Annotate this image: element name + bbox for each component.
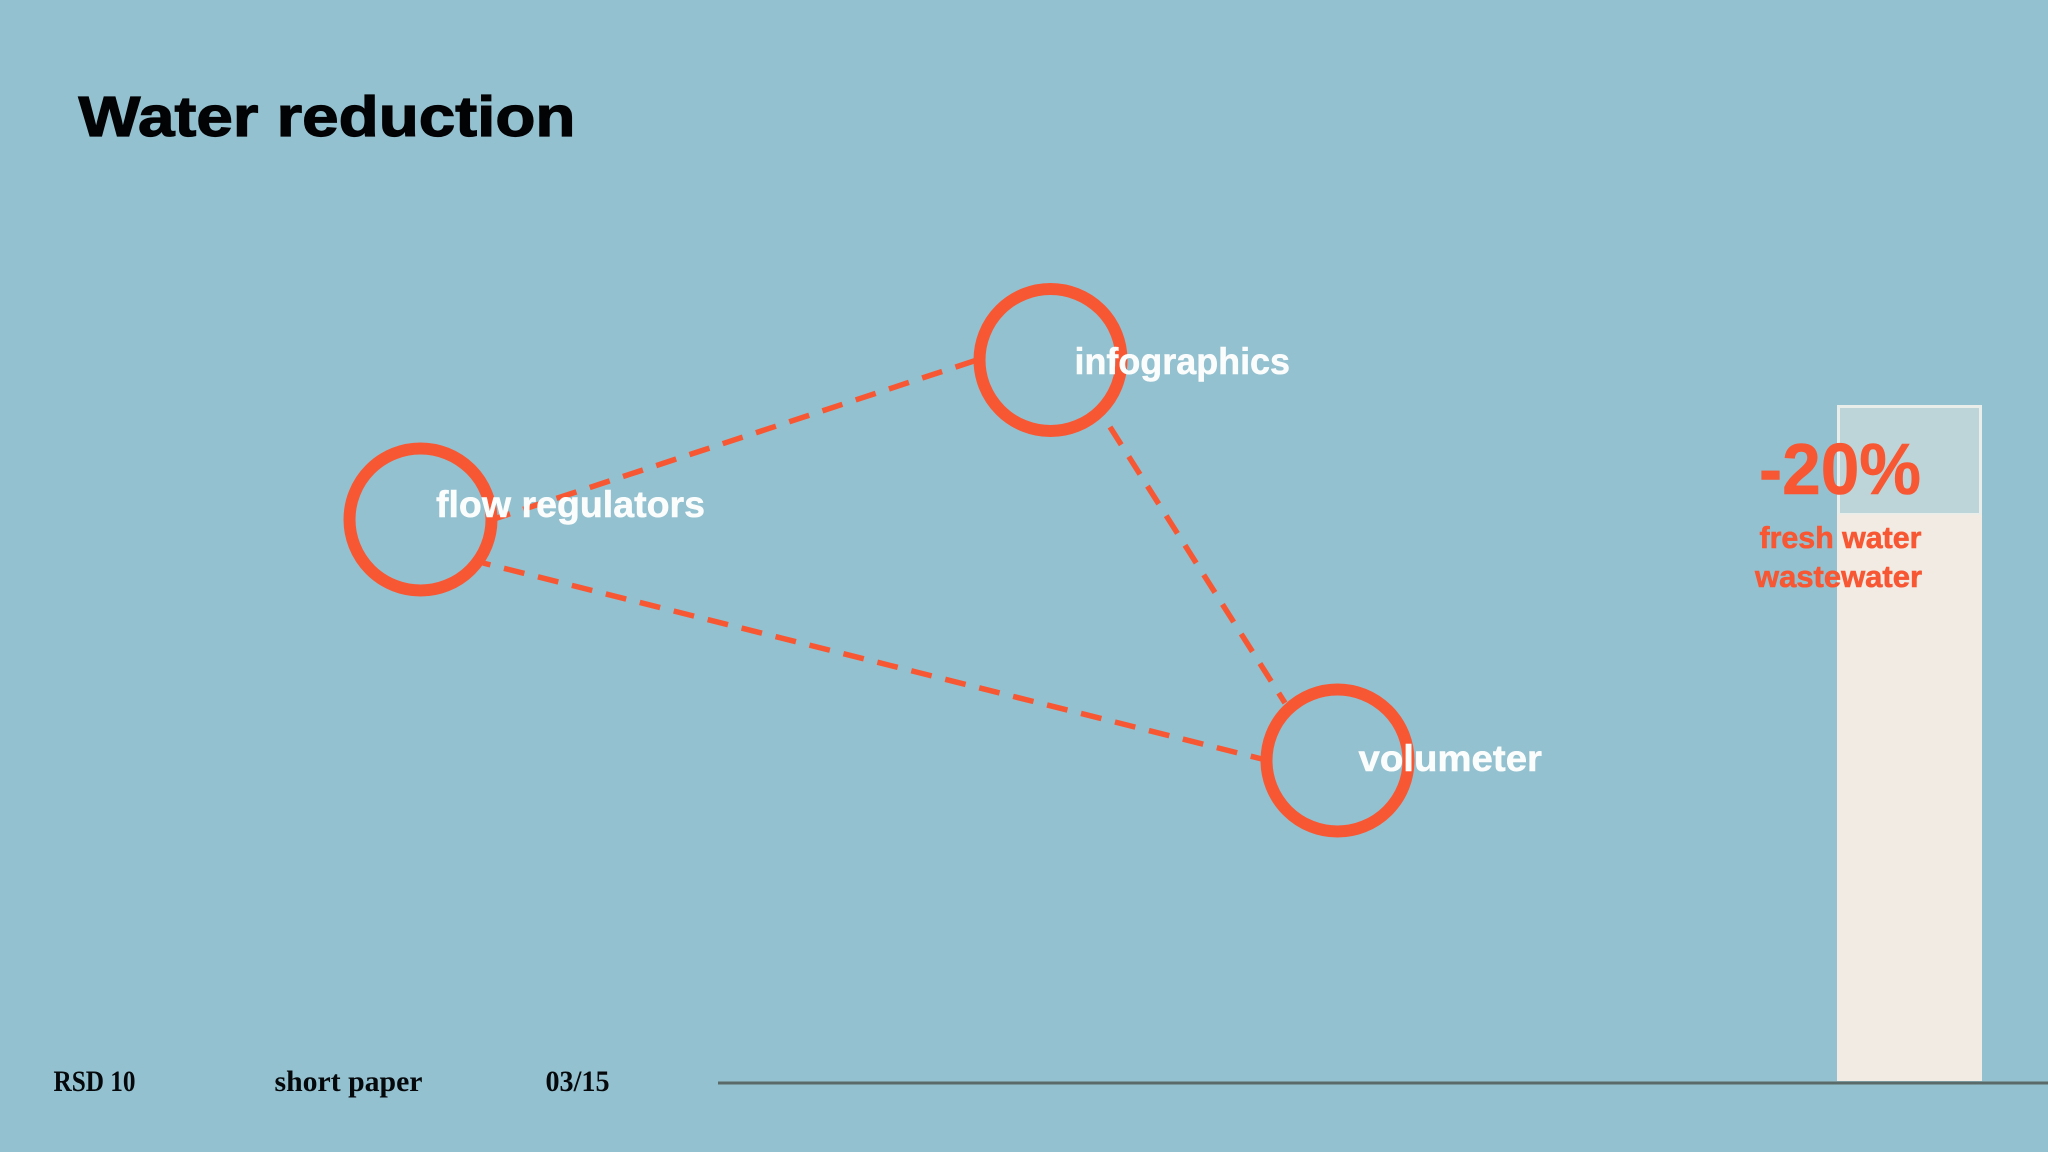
label: volumeter	[1358, 738, 1542, 779]
footer: conference: RSD 10	[54, 1065, 136, 1098]
node: volumeter	[1266, 690, 1542, 832]
label: flow regulators	[436, 484, 705, 525]
footer rule	[718, 1082, 2048, 1084]
bar segment: remaining volume	[1837, 514, 1982, 1081]
bar segment: reduced portion	[1838, 406, 1980, 514]
dashed connector: infographics to volumeter	[1110, 427, 1285, 703]
dashed connector: flow regulators to infographics	[490, 360, 977, 520]
ring	[980, 289, 1122, 431]
bar chart: water volume column	[1837, 406, 1982, 1081]
node: infographics	[980, 289, 1290, 431]
dashed connector: flow regulators to volumeter	[483, 563, 1262, 759]
ring	[1266, 690, 1408, 832]
label: wastewater: wastewater	[1754, 559, 1922, 594]
title: Water reduction	[78, 85, 576, 149]
percentage: -20%	[1759, 430, 1921, 510]
label: infographics	[1074, 341, 1290, 382]
label: fresh water: fresh water	[1760, 520, 1922, 555]
callout: reduction figure	[1754, 430, 1922, 594]
ring	[350, 448, 492, 590]
node: flow regulators	[350, 448, 705, 590]
footer: page number: 03/15	[546, 1065, 610, 1098]
footer: paper type: short paper	[274, 1065, 422, 1098]
footer	[54, 1065, 2048, 1098]
